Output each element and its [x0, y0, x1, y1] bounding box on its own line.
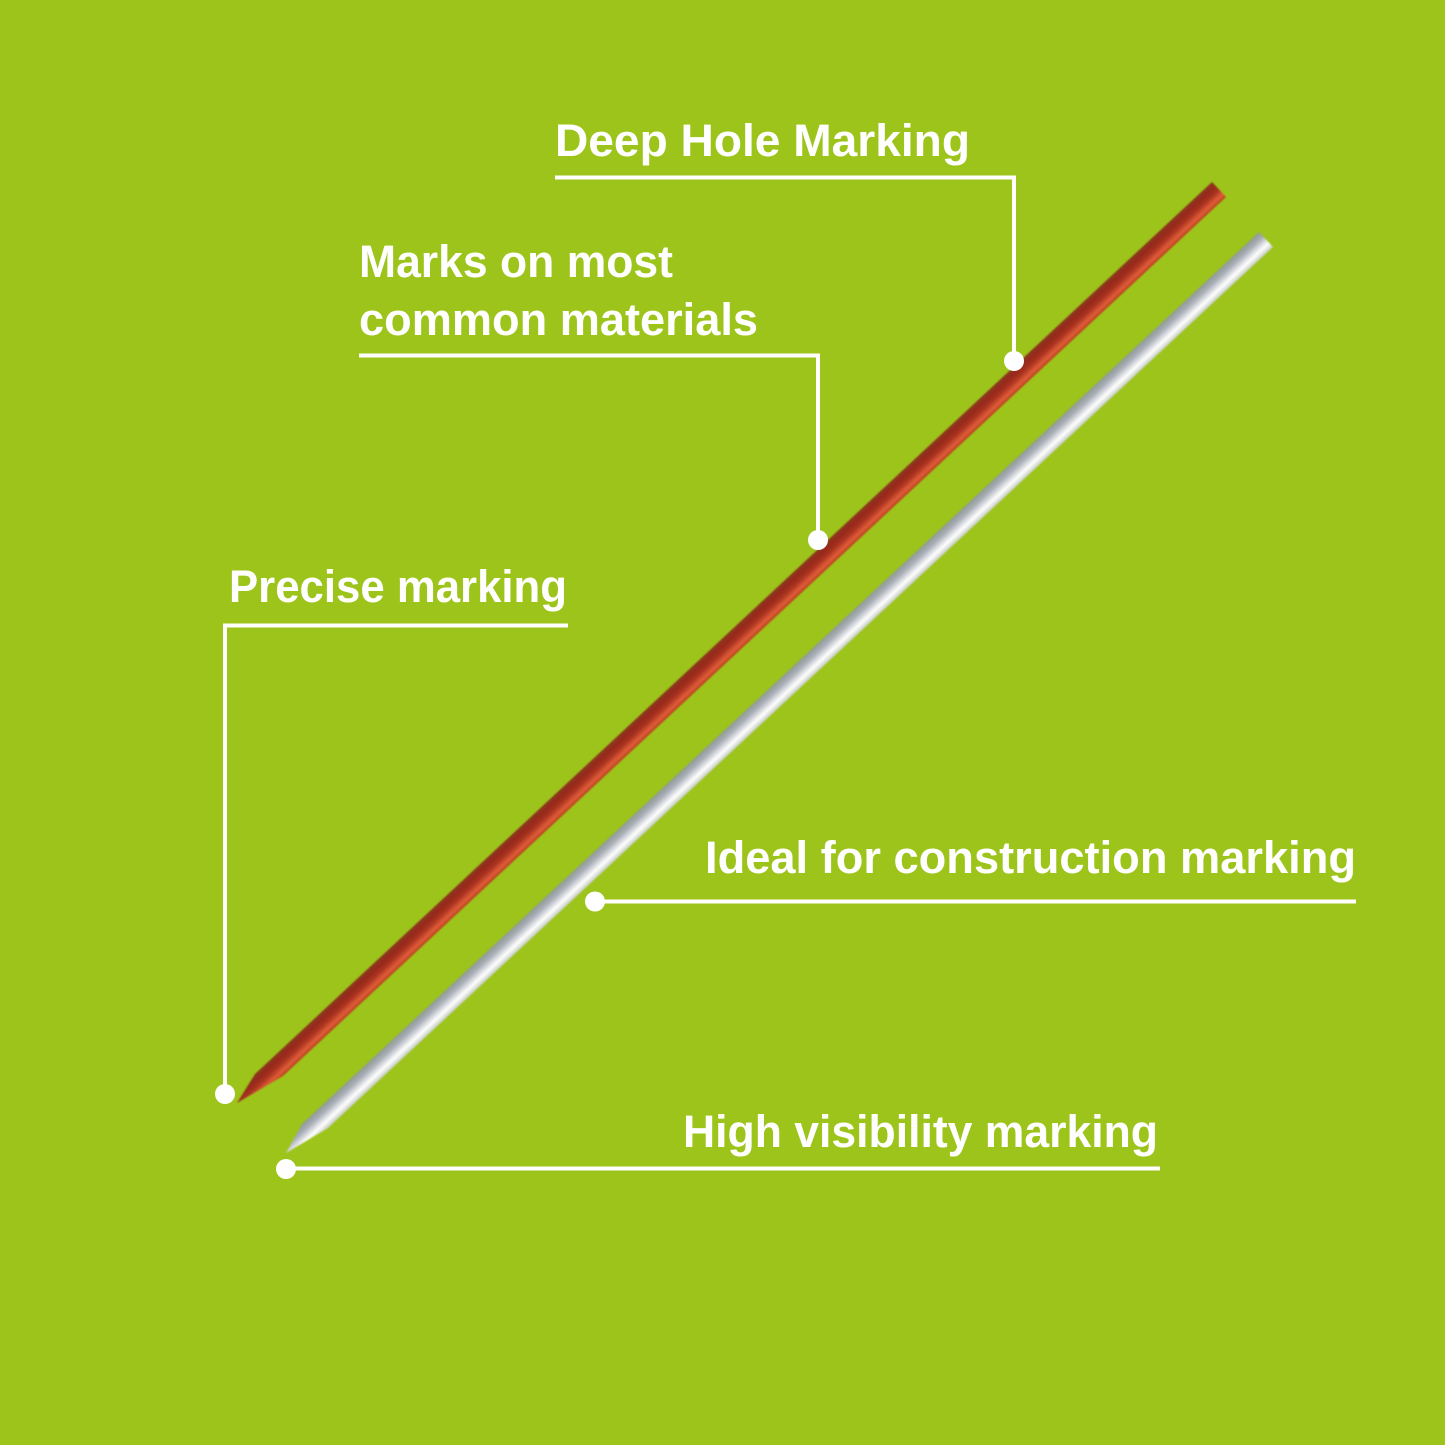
callout: Precise marking: Precise marking — [229, 561, 567, 612]
red marker lead — [237, 182, 1226, 1103]
callout: High visibility marking: High visibility marking — [683, 1106, 1158, 1157]
callout: Marks on most common materials: Marks on most — [359, 236, 673, 287]
callout: High visibility marking — [276, 1106, 1160, 1179]
callout: Deep Hole Marking: Deep Hole Marking — [555, 115, 970, 166]
callout: Ideal for construction marking: Ideal for construction marking — [705, 832, 1356, 883]
callout: Marks on most common materials — [359, 236, 828, 550]
callout: Ideal for construction marking — [585, 832, 1356, 912]
silver marker lead — [286, 232, 1273, 1153]
callout: Deep Hole Marking — [555, 115, 1024, 371]
callout: Precise marking — [215, 561, 568, 1104]
callout: Marks on most common materials: common materials — [359, 294, 758, 345]
